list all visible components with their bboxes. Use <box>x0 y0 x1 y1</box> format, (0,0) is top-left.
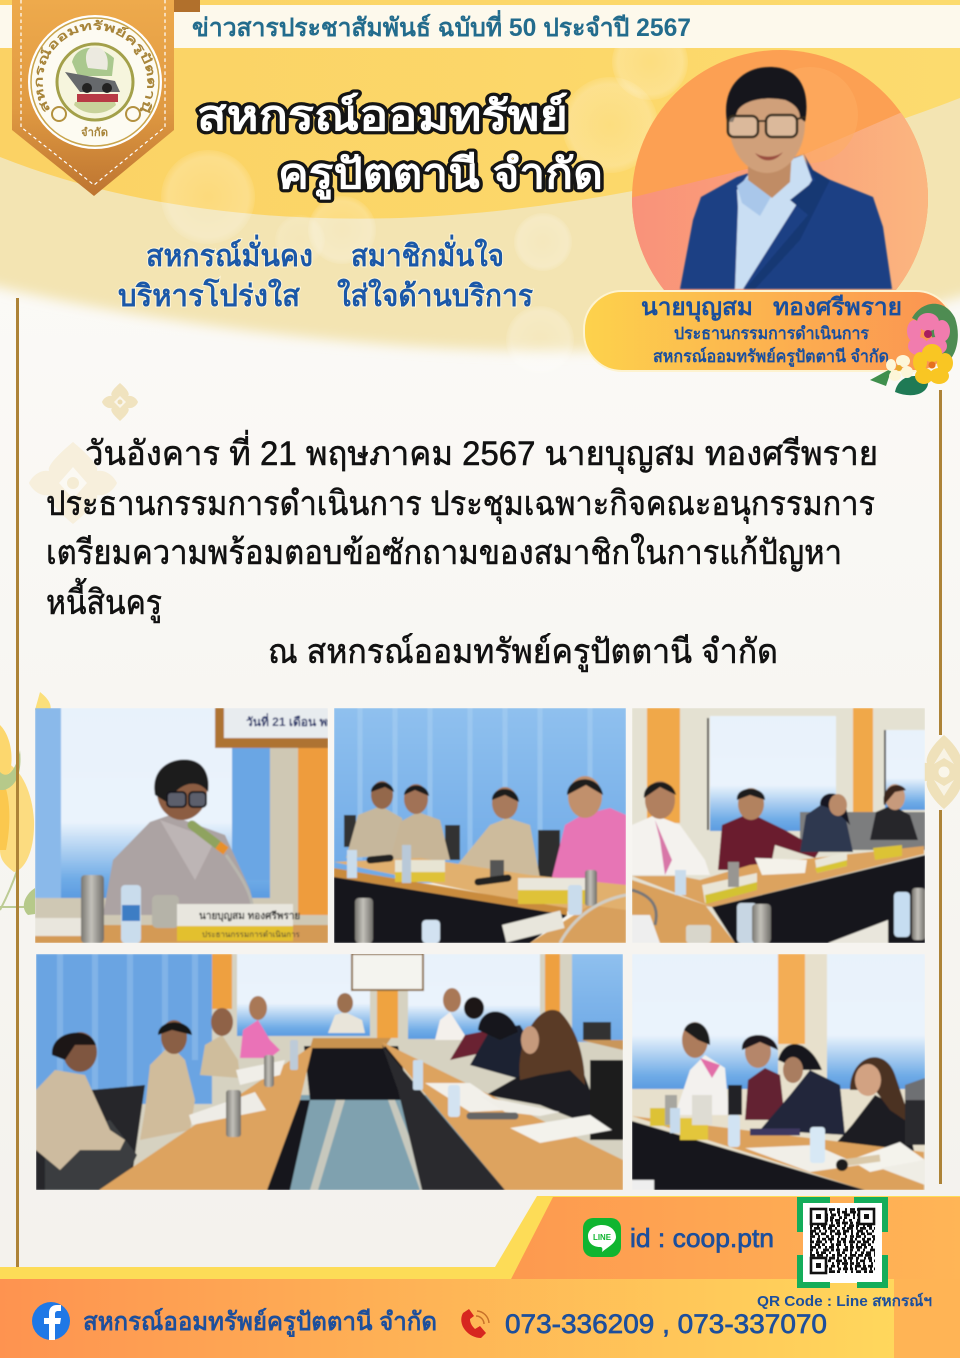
QR caption: QR Code : Line สหกรณ์ฯ <box>757 1292 932 1310</box>
header strip <box>0 5 960 48</box>
announcement text <box>46 430 878 672</box>
photo 4: wide shot of the meeting room <box>36 954 623 1190</box>
telephone numbers: 073-336209 , 073-337070 <box>505 1309 827 1339</box>
announcement text: ณ สหกรณ์ออมทรัพย์ครูปัตตานี จำกัด <box>268 633 778 672</box>
portrait: man in blue suit <box>680 67 892 289</box>
flower bouquet <box>870 304 958 395</box>
chairman role: ประธานกรรมการดำเนินการ <box>674 324 870 343</box>
ribbon with logo <box>12 0 200 196</box>
footer band <box>0 1196 960 1358</box>
announcement text: ประธานกรรมการดำเนินการ ประชุมเฉพาะกิจคณะอนุกรรมการ <box>46 485 875 524</box>
portrait circle <box>630 48 930 295</box>
announcement text: เตรียมความพร้อมตอบข้อซักถามของสมาชิกในการแก้ปัญหา <box>46 533 842 572</box>
ornament: large thai motif <box>29 442 117 524</box>
newsletter title: ข่าวสารประชาสัมพันธ์ ฉบับที่ 50 ประจำปี 2567 <box>192 10 691 42</box>
name pill <box>584 291 954 371</box>
slogan: สหกรณ์มั่นคง <box>146 234 313 273</box>
main title: ครูปัตตานี จำกัด <box>278 150 603 200</box>
chairman name <box>641 294 902 323</box>
icon: LINE <box>583 1218 621 1257</box>
photo 2: committee members in uniform <box>334 708 626 943</box>
left decorative flower <box>0 692 51 915</box>
chairman name: ทองศรีพราย <box>773 294 902 321</box>
gold border lines <box>16 298 942 1267</box>
facebook page name: สหกรณ์ออมทรัพย์ครูปัตตานี จำกัด <box>83 1307 437 1338</box>
slogan: บริหารโปร่งใส <box>118 277 301 313</box>
slogan <box>118 234 533 313</box>
photo 1: chairman speaking: ประธานกรรมการดำเนินการ <box>202 930 301 939</box>
slogan: ใส่ใจด้านบริการ <box>337 278 533 313</box>
announcement text: วันอังคาร ที่ 21 พฤษภาคม 2567 นายบุญสม ทองศรีพราย <box>85 430 878 474</box>
icon: Facebook <box>32 1302 70 1340</box>
chairman name: นายบุญสม <box>641 294 753 323</box>
line id: id : coop.ptn <box>630 1223 774 1253</box>
photo 1: chairman speaking <box>35 708 343 943</box>
announcement text: หนี้สินครู <box>46 578 162 623</box>
photo 1: chairman speaking: วันที่ 21 เดือน พฤษ <box>246 713 343 729</box>
photo 3: younger members at table <box>632 708 925 943</box>
logo seal <box>28 15 162 149</box>
logo seal: จำกัด <box>81 126 108 139</box>
ornament: small thai motif <box>102 383 138 421</box>
main title: สหกรณ์ออมทรัพย์ <box>197 92 568 139</box>
logo seal: สหกรณ์ออมทรัพย์ครูปัตตานี <box>36 20 154 114</box>
main title <box>197 92 603 200</box>
slogan: สมาชิกมั่นใจ <box>351 234 504 273</box>
ornament: right thai motif <box>912 735 960 809</box>
organisation name: สหกรณ์ออมทรัพย์ครูปัตตานี จำกัด <box>653 346 889 368</box>
icon: telephone <box>461 1309 489 1338</box>
photo 1: chairman speaking: นายบุญสม ทองศรีพราย <box>199 910 300 922</box>
icon: LINE: LINE <box>593 1233 612 1242</box>
photo 5: close-up of members on the right side <box>632 954 925 1190</box>
QR code <box>800 1200 885 1285</box>
